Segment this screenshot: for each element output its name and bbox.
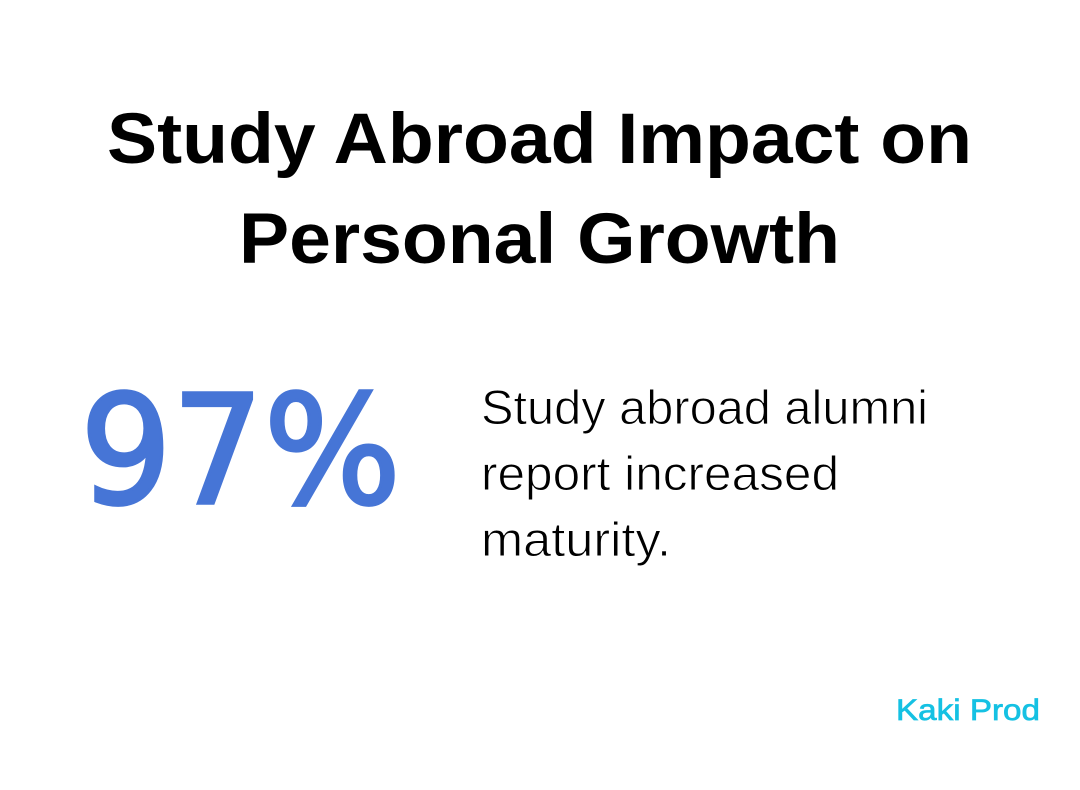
title: Study Abroad Impact on [107,100,972,179]
description text [481,382,928,567]
logo: Kaki Prod: Kaki Prod [896,694,1040,727]
description text: report increased [481,448,839,501]
description text: maturity. [481,514,671,567]
description text: Study abroad alumni [481,382,928,435]
title: Personal Growth [239,200,840,279]
big statistic: 97%: 97% [80,363,401,539]
title [107,100,972,279]
